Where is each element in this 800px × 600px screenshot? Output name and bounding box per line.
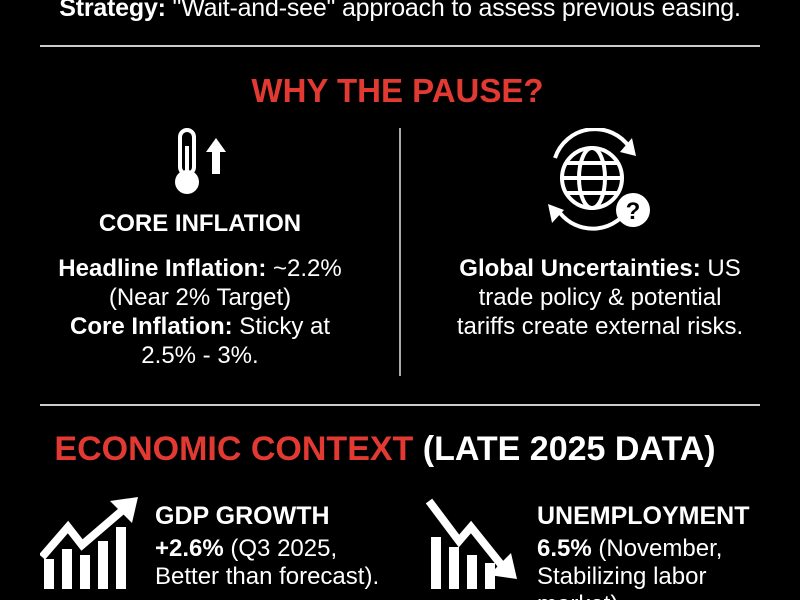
panel: unemployment: Stabilizing labor: [537, 563, 706, 590]
icon: globe: [548, 128, 650, 231]
text: Core Inflation: Sticky at: [70, 313, 330, 340]
text: Global Uncertainties: US: [459, 255, 741, 282]
panel: gdp: GDP GROWTH: [155, 502, 330, 530]
text: tariffs create external risks.: [457, 313, 743, 340]
panel: core inflation: [58, 128, 342, 369]
panel: gdp: Better than forecast).: [155, 563, 379, 590]
subheading: CORE INFLATION: [99, 210, 301, 237]
text: [58, 255, 342, 369]
text: [457, 255, 743, 340]
text: 2.5% - 3%.: [141, 342, 259, 369]
text: trade policy & potential: [479, 284, 721, 311]
icon: globe: ?: [626, 198, 640, 225]
heading: economic context: ECONOMIC CONTEXT (LATE 2025 DATA): [54, 430, 716, 468]
panel: unemployment: [426, 498, 750, 600]
panel: unemployment: UNEMPLOYMENT: [537, 502, 750, 530]
panel: global uncertainties: [457, 128, 743, 340]
panel: gdp: +2.6% (Q3 2025,: [155, 535, 337, 562]
text: Headline Inflation: ~2.2%: [58, 255, 342, 282]
icon: thermometer: [175, 128, 226, 194]
heading: why the pause: WHY THE PAUSE?: [251, 72, 544, 109]
icon: rising chart: [40, 497, 138, 589]
panel: unemployment: 6.5% (November,: [537, 535, 722, 562]
panel: gdp: [40, 497, 379, 590]
icon: falling chart: [426, 498, 517, 589]
text: (Near 2% Target): [109, 284, 291, 311]
